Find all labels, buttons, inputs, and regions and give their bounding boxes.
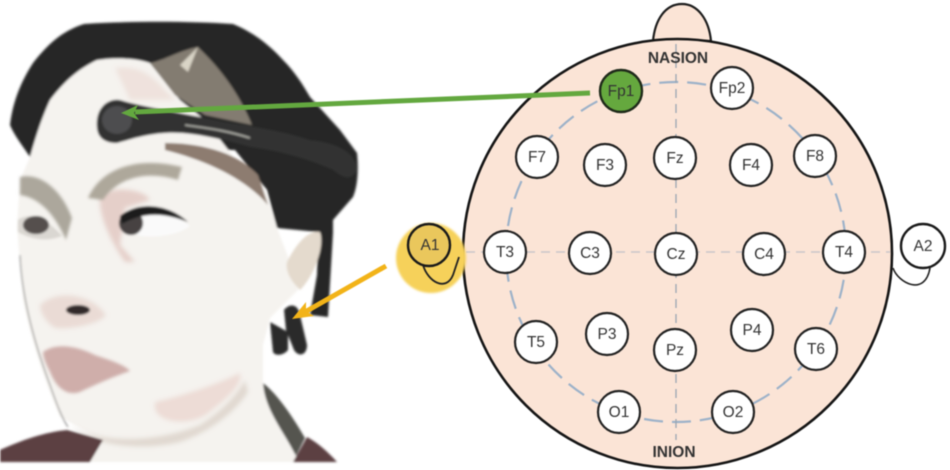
- electrode: T5: T5: [527, 334, 545, 351]
- electrode: F7: F7: [528, 149, 546, 166]
- electrode: A2 with ear loop: [893, 224, 945, 285]
- electrode: F3: F3: [596, 157, 614, 174]
- electrode: Fz: Fz: [666, 150, 684, 167]
- electrode: Fp1 (active, green): [600, 70, 642, 112]
- electrode: Fp2: Fp2: [719, 80, 745, 97]
- electrode: P3: P3: [598, 326, 616, 343]
- arrow: yellow from A1 to ear clip: [292, 266, 386, 319]
- shirt: right shoulder: [293, 437, 337, 462]
- illustration: woman wearing EEG headset: [0, 22, 358, 462]
- electrode: Fp2: [711, 67, 753, 109]
- electrode: A1 with yellow highlight: A1: [421, 237, 439, 254]
- left eyebrow: [20, 176, 72, 240]
- shirt: left shoulder: [0, 430, 103, 462]
- brow shadow and eye socket: [100, 190, 150, 262]
- electrode: Cz: [655, 233, 697, 275]
- headband highlight: [185, 125, 250, 138]
- electrode: T6: [795, 328, 837, 370]
- pale strand highlight: [180, 47, 198, 72]
- electrode: F3: [584, 144, 626, 186]
- electrode: O2: O2: [723, 404, 743, 421]
- electrode: O1: [598, 391, 640, 433]
- lips: [43, 346, 130, 393]
- electrode: F7: [516, 136, 558, 178]
- arrow: green from Fp1 to forehead sensor: [121, 93, 590, 120]
- electrode: T4: [823, 231, 865, 273]
- electrode: F8: F8: [806, 148, 824, 165]
- electrode: C4: [743, 233, 785, 275]
- electrode: A1 with yellow highlight: [396, 223, 466, 293]
- neck hair: [263, 383, 305, 456]
- left eye: [18, 216, 62, 239]
- electrode: Pz: [654, 329, 696, 371]
- electrode: T5: [515, 321, 557, 363]
- electrode: P4: [731, 309, 773, 351]
- hair under headband: [165, 143, 268, 205]
- diagram: 10-20 electrode head map: [463, 4, 892, 468]
- electrode: F4: [730, 144, 772, 186]
- nose: [40, 295, 106, 328]
- electrode: C4: C4: [754, 246, 774, 263]
- electrode: F8: [794, 135, 836, 177]
- electrode: Pz: Pz: [666, 342, 684, 359]
- chin shadow: [155, 373, 240, 422]
- head circle: [463, 39, 892, 468]
- electrode: O1: O1: [609, 404, 629, 421]
- electrode: O2: [712, 391, 754, 433]
- forehead blush: [115, 67, 175, 100]
- ear clip: [270, 306, 307, 355]
- right eye: [119, 206, 190, 237]
- forehead hair strands: [150, 47, 252, 125]
- headband: [97, 100, 357, 178]
- face and neck: [17, 58, 300, 462]
- electrode: Cz: Cz: [667, 246, 685, 263]
- electrode: T4: T4: [835, 244, 853, 261]
- electrode: Fp1 (active, green): Fp1: [608, 83, 634, 100]
- right eyebrow: [88, 163, 182, 200]
- face outline: [20, 255, 68, 427]
- electrode: T3: T3: [496, 244, 514, 261]
- label: nasion: NASION: [648, 50, 708, 67]
- label: inion: INION: [652, 444, 696, 461]
- jaw shading: [70, 380, 248, 447]
- electrode: T6: T6: [807, 341, 825, 358]
- hair: [10, 22, 358, 317]
- electrode: C3: C3: [580, 245, 600, 262]
- ear: [287, 232, 321, 290]
- headband sensor: [102, 106, 132, 134]
- nose bump: [653, 4, 711, 41]
- electrode: T3: [484, 231, 526, 273]
- electrode: A2 with ear loop: A2: [914, 238, 932, 255]
- electrode: C3: [569, 232, 611, 274]
- electrode: Fz: [654, 137, 696, 179]
- electrode: P3: [586, 313, 628, 355]
- electrode: P4: P4: [743, 322, 762, 339]
- electrode: F4: F4: [742, 157, 760, 174]
